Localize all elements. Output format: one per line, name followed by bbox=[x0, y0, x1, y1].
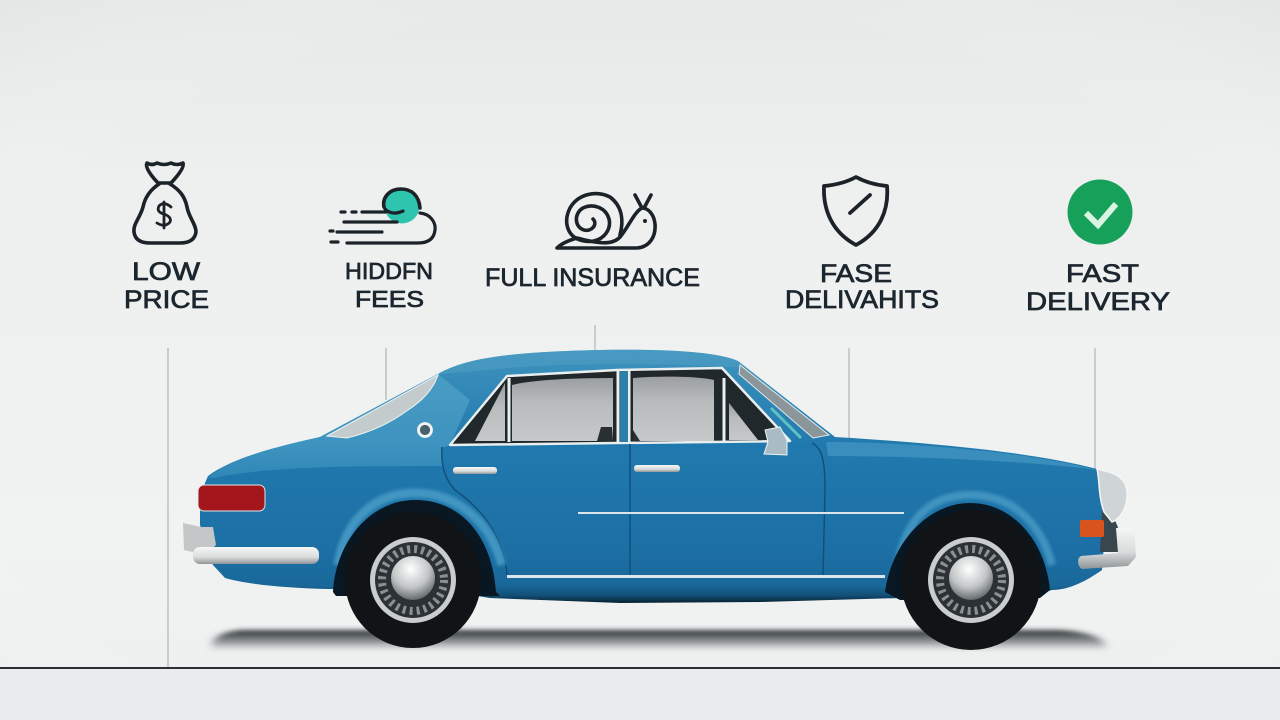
side window frame bbox=[450, 368, 790, 445]
door seams bbox=[442, 443, 825, 576]
icon: shield bbox=[824, 177, 887, 245]
pillar between doors bbox=[620, 371, 628, 442]
rear wheel bbox=[345, 512, 481, 648]
icon: snail bbox=[557, 194, 655, 248]
rear window bbox=[327, 375, 438, 438]
door handles bbox=[453, 465, 680, 474]
hood highlight bbox=[826, 442, 1097, 470]
tail light bbox=[198, 485, 265, 511]
turn indicator bbox=[1080, 520, 1104, 537]
label: full insurance: FULL INSURANCE bbox=[485, 264, 700, 292]
label: low price: PRICE bbox=[124, 286, 209, 314]
label: garbled fast delivery: DELIVAHITS bbox=[785, 286, 939, 314]
label: low price bbox=[124, 258, 209, 314]
label: fast delivery: FAST bbox=[1066, 260, 1139, 288]
label: hidden fees: FEES bbox=[355, 286, 424, 312]
side mirror bbox=[764, 427, 787, 455]
label: low price: LOW bbox=[132, 258, 200, 286]
label: garbled fast delivery bbox=[785, 260, 939, 314]
headlamp bbox=[1097, 469, 1127, 522]
front wheel bbox=[901, 510, 1041, 650]
car body bbox=[200, 350, 1108, 603]
shoulder highlight bbox=[208, 374, 470, 478]
label: garbled fast delivery: FASE bbox=[820, 260, 892, 288]
icon: green check bbox=[1068, 180, 1132, 244]
ground shadow bbox=[212, 630, 1106, 652]
label: hidden fees bbox=[345, 258, 433, 312]
windshield bbox=[739, 365, 829, 438]
front bumper bbox=[1078, 527, 1136, 569]
icon: fast cloud bbox=[330, 188, 435, 243]
label: hidden fees: HIDDFN bbox=[345, 258, 433, 284]
icon: money bag bbox=[134, 163, 196, 243]
label: fast delivery bbox=[1026, 260, 1170, 316]
wheel arches bbox=[333, 493, 1052, 600]
roof highlight bbox=[440, 350, 745, 374]
ground line bbox=[0, 667, 1280, 720]
column: fast delivery variant bbox=[785, 177, 939, 314]
label: fast delivery: DELIVERY bbox=[1026, 288, 1170, 316]
guide lines bbox=[168, 325, 1095, 667]
lamp shadow gap bbox=[1100, 510, 1120, 552]
blue car bbox=[183, 350, 1136, 650]
chrome strips bbox=[507, 512, 904, 578]
window pillars bbox=[509, 370, 724, 443]
column: full insurance bbox=[485, 194, 700, 292]
rear bumper bbox=[183, 523, 319, 564]
column: low price bbox=[124, 163, 209, 314]
side window glass bbox=[475, 377, 758, 441]
seats bbox=[597, 427, 640, 441]
column: fast delivery bbox=[1026, 180, 1170, 316]
column: hidden fees bbox=[330, 188, 435, 312]
fuel cap bbox=[418, 424, 432, 436]
